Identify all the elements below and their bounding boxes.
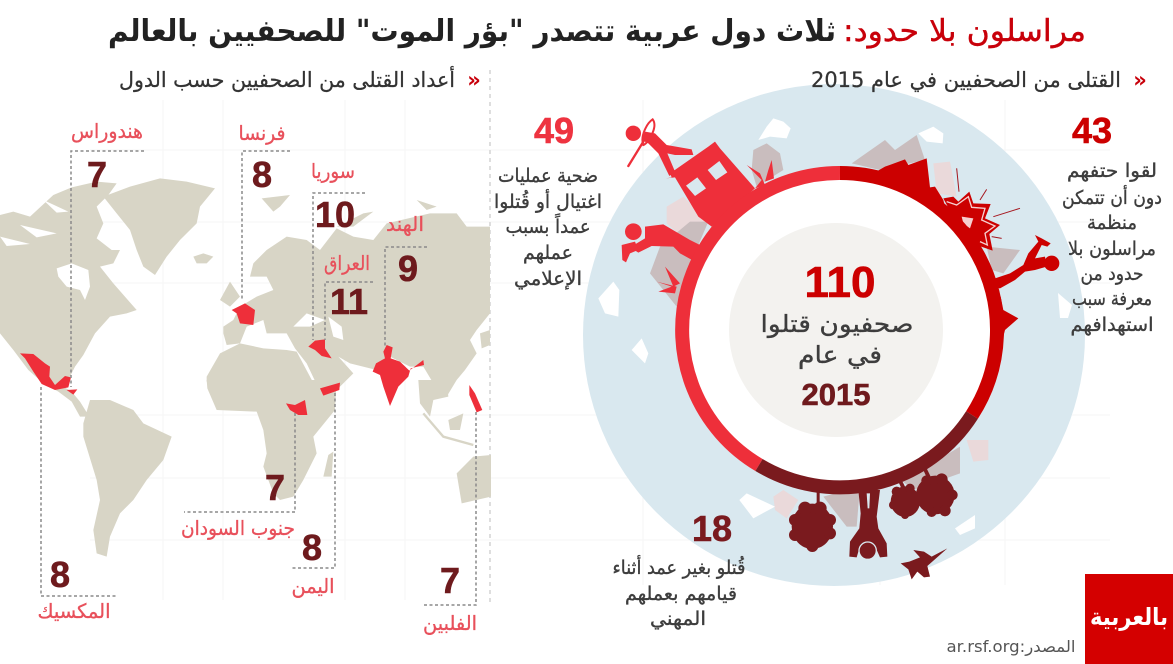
subheading: killed in 2015: القتلى من الصحفيين في عام 2015 [811,68,1121,92]
stat: 43: منظمة [1087,212,1137,234]
icons: fallen person and rubble [990,235,1059,350]
icon: factory silhouette [873,158,947,213]
stat: 18 [612,508,746,630]
icon: jet [901,548,947,579]
icon: grass [747,160,774,188]
country: France: 8 [252,154,272,195]
country: Yemen: 8 [302,527,322,568]
ring: killed unintentionally [759,415,972,487]
country: Syria [311,159,355,235]
country: Iraq [324,251,370,322]
icons: bottom scene [789,468,958,579]
country: South Sudan [181,467,295,540]
icon: house [666,142,755,227]
stat: 43 [1062,110,1162,336]
map land upper [0,178,490,417]
Yemen [320,383,340,396]
country: Philippines [423,560,477,635]
country: South Sudan: 7 [265,467,285,508]
highlighted countries [20,303,482,415]
subheading: killed by country: » [467,68,481,92]
subheading: killed by country: أعداد القتلى من الصحفيين حسب الدول [119,66,455,92]
stat: 49: عملهم [523,242,573,264]
ring: unknown motive [840,173,997,415]
source: المصدر:ar.rsf.org [946,637,1076,657]
icons: dark red scene [873,158,1020,251]
stat: 110 centre: في عام [798,341,882,369]
subheading: killed in 2015: » [1133,68,1147,92]
country: Mexico: 8 [50,554,70,595]
country: South Sudan: جنوب السودان [181,516,295,540]
stat: 110 centre [760,258,914,412]
country: Philippines: الفلبين [423,611,477,635]
stat: 49: 49 [534,110,574,151]
stat: 110 centre: 110 [805,258,875,307]
stat: 110 centre: 2015 [802,377,870,412]
Honduras [67,389,77,395]
stat: 43: معرفة سبب [1072,288,1152,310]
clouds and background shapes, top [598,118,1020,363]
stat: 18: قُتلو بغير عمد أثناء [612,555,746,579]
France [232,303,255,325]
icon: hanging person [849,490,887,559]
country: India: 9 [398,248,418,289]
stat: 18: 18 [692,508,732,549]
country: Iraq: 11 [330,281,368,322]
right-side cloud [1058,293,1072,318]
stat: 43: 43 [1072,110,1112,151]
country: Honduras [71,119,143,195]
country: France: فرنسا [238,121,286,145]
title: ثلاث دول عربية تتصدر "بؤر الموت" للصحفيين بالعالم [108,14,836,49]
stat: 43: دون أن تتمكن [1062,185,1162,209]
icon: tree right large [916,468,958,517]
country: Honduras: 7 [87,154,107,195]
map land lower [83,380,491,557]
icons: red figures and house [622,119,774,293]
country: France [238,121,286,195]
country: Philippines: 7 [440,560,460,601]
country: Yemen [292,527,334,598]
title: مراسلون بلا حدود: [843,14,1086,49]
country: India [386,212,424,289]
globe background [583,84,1085,586]
stat: 49: الإعلامي [514,268,582,290]
panel: globe chart [583,84,1085,586]
stat: 43: حدود من [1080,263,1144,285]
panel: world map [0,178,491,557]
stat: 43: استهدافهم [1070,314,1154,336]
country: Syria: سوريا [311,159,355,183]
clouds and background shapes, bottom [739,440,988,535]
stat: 49 [494,110,602,290]
South Sudan [286,400,307,415]
Philippines [469,385,482,412]
country: Iraq: العراق [324,251,370,275]
Mexico [20,353,71,390]
inner white disc [685,175,995,485]
stat: 18: قيامهم بعملهم [625,583,737,605]
icon: explosion [943,192,1000,251]
country: Mexico: المكسيك [38,599,110,623]
icon: crouching photographer [622,223,703,262]
country: Yemen: اليمن [292,574,334,598]
stat: 43: مراسلون بلا [1068,238,1156,260]
stat: 49: عمداً بسبب [506,213,590,238]
country: India: الهند [386,212,424,236]
India [373,345,424,406]
stat: 18: المهني [650,608,706,630]
icon: journalist on roof [626,119,693,176]
stat: 110 centre: صحفيون قتلوا [760,310,914,338]
icon: tree left [789,490,836,552]
icon: tree right small [889,480,920,519]
stat: 43: لقوا حتفهم [1067,160,1157,182]
inner grey disc [729,223,943,437]
stat: 49: ضحية عمليات [498,165,598,187]
ring: targeted victims [682,173,840,465]
stat: 49: اغتيال أو قُتلوا [494,189,602,213]
logo [1085,574,1173,664]
Iraq and Syria [308,339,332,358]
country: Syria: 10 [315,194,355,235]
connector lines [41,151,476,605]
country: Honduras: هندوراس [71,119,143,143]
country: Mexico [38,554,110,623]
